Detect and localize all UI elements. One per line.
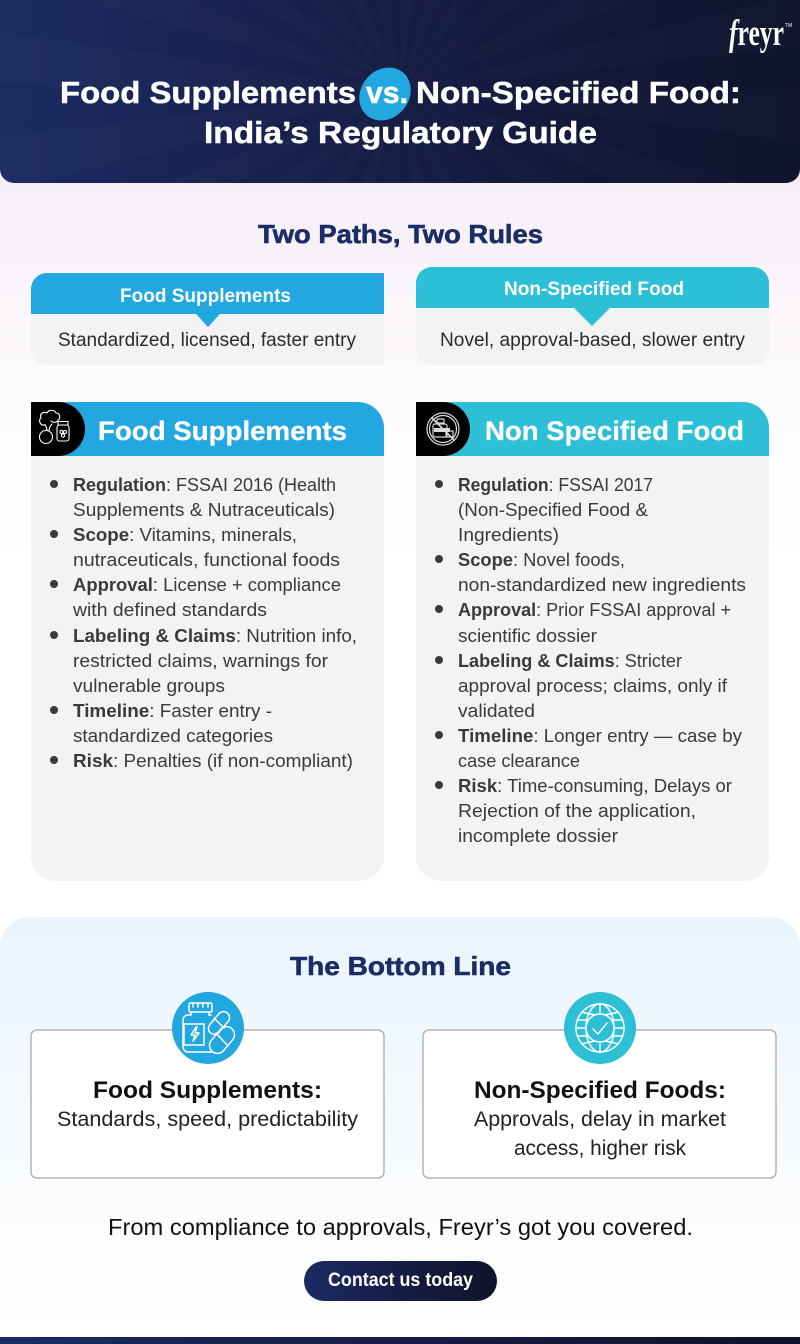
bullet list: food supplements: Regulation: FSSAI 2016 (Health (73, 474, 336, 495)
bullet list: food supplements: Approval: License + compliance (73, 574, 341, 595)
icon: globe with check (564, 992, 636, 1064)
bullet list: food supplements: nutraceuticals, functional foods (73, 549, 340, 570)
bullet list: non specified food: non-standardized new ingredients (458, 574, 746, 595)
bullet list: food supplements: Risk: Penalties (if non-compliant) (73, 750, 353, 771)
icon: prohibited product (427, 413, 459, 445)
card: food supplements takeaway (31, 1030, 384, 1178)
header banner (0, 0, 800, 183)
summary card: non-specified food (416, 267, 769, 365)
bullet list: non specified food: Scope: Novel foods, (458, 549, 625, 570)
title: India’s Regulatory Guide (204, 115, 597, 150)
bullet list: non specified food: Rejection of the application, (458, 800, 696, 821)
bullet list: non specified food: Regulation: FSSAI 2017 (458, 474, 653, 495)
bullet list: non specified food: (Non-Specified Food & (458, 499, 649, 520)
bottom section background (0, 917, 800, 1337)
bullet list: non specified food: approval process; claims, only if (458, 675, 728, 696)
title: vs. (366, 75, 408, 110)
panel: food supplements: Food Supplements (98, 416, 347, 446)
bullet list: food supplements: Supplements & Nutraceuticals) (73, 499, 335, 520)
button: contact us today: Contact us today (328, 1270, 473, 1291)
panel: food supplements (31, 402, 384, 881)
bullet list: non specified food: Ingredients) (458, 524, 559, 545)
card: non-specified foods takeaway: access, higher risk (514, 1137, 686, 1160)
heading: two paths: Two Paths, Two Rules (258, 219, 543, 249)
bullet list: non specified food: Risk: Time-consuming, Delays or (458, 775, 732, 796)
card: food supplements takeaway: Food Supplements: (93, 1077, 322, 1104)
summary card: non-specified food: Non-Specified Food (504, 279, 684, 300)
bullet list: food supplements: standardized categories (73, 725, 273, 746)
title (60, 75, 741, 150)
card: non-specified foods takeaway: Approvals, delay in market (474, 1108, 726, 1131)
title: Food Supplements (60, 75, 356, 110)
bullet list: non specified food: Approval: Prior FSSAI approval + (458, 599, 731, 620)
closing statement: From compliance to approvals, Freyr’s got you covered. (108, 1214, 693, 1240)
bullet list: food supplements: Scope: Vitamins, minerals, (73, 524, 297, 545)
bullet list: food supplements: Labeling & Claims: Nutrition info, (73, 625, 357, 646)
panel: non specified food: Non Specified Food (485, 416, 744, 446)
summary card: non-specified food: Novel, approval-based, slower entry (440, 330, 746, 351)
summary card: food supplements (31, 273, 384, 365)
vs. badge (349, 57, 421, 131)
logo: freyr: TM (785, 23, 792, 29)
card: food supplements takeaway: Standards, speed, predictability (57, 1108, 359, 1131)
bullet list: food supplements: restricted claims, warnings for (73, 650, 328, 671)
icon: vegetables and jar (40, 410, 69, 444)
footer bar (0, 1337, 800, 1344)
heading: the bottom line: The Bottom Line (290, 951, 511, 981)
button: contact us today (304, 1261, 497, 1301)
title: Non-Specified Food: (416, 75, 741, 110)
bullet list: non specified food: incomplete dossier (458, 825, 618, 846)
card: non-specified foods takeaway (423, 1030, 776, 1178)
card: non-specified foods takeaway: Non-Specified Foods: (474, 1077, 726, 1104)
bullet list: food supplements: with defined standards (72, 599, 267, 620)
bullet list: food supplements (50, 474, 357, 771)
bullet list: food supplements: vulnerable groups (73, 675, 225, 696)
bullet list: food supplements: Timeline: Faster entry - (73, 700, 272, 721)
page background (0, 170, 800, 570)
bullet list: non specified food: case clearance (458, 750, 580, 771)
bullet list: non specified food: scientific dossier (458, 625, 597, 646)
icon: supplement bottle and capsules (172, 992, 244, 1064)
bullet list: non specified food (435, 474, 746, 846)
bullet list: non specified food: Timeline: Longer entry — case by (458, 725, 743, 746)
summary card: food supplements: Food Supplements (120, 286, 291, 307)
panel: non specified food (416, 402, 769, 881)
bullet list: non specified food: Labeling & Claims: Stricter (458, 650, 682, 671)
bullet list: non specified food: validated (458, 700, 535, 721)
summary card: food supplements: Standardized, licensed, faster entry (58, 330, 356, 351)
